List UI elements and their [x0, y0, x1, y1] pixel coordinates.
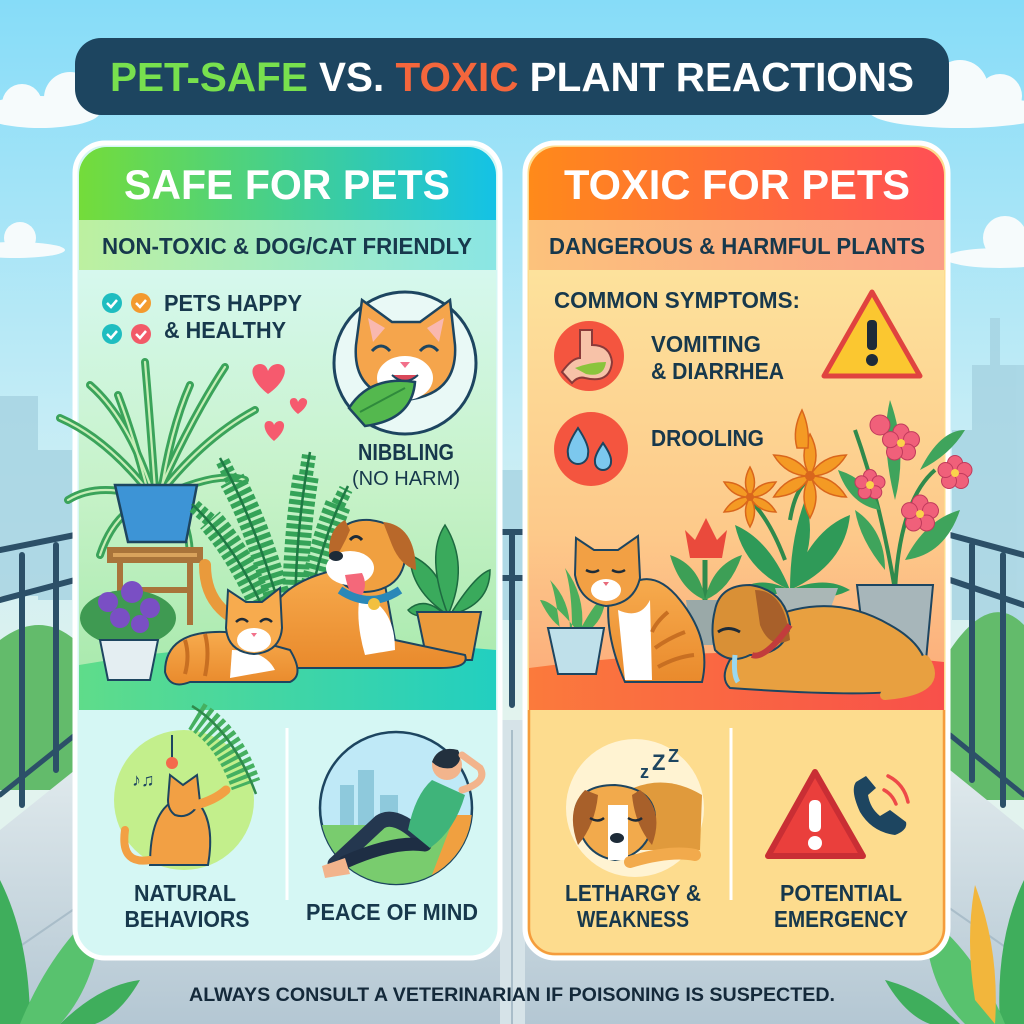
icon: emergency triangle and phone [768, 772, 908, 856]
icon: potted plant right [408, 525, 490, 660]
icon: warning triangle [824, 292, 920, 376]
vomiting text [651, 331, 784, 384]
toxic subheader: DANGEROUS & HARMFUL PLANTS [549, 233, 925, 259]
tulip [670, 518, 742, 645]
safe header [79, 147, 496, 220]
lethargy text: LETHARGY & [565, 880, 701, 906]
railings [0, 532, 1024, 805]
nibbling text: NIBBLING [358, 439, 454, 465]
icon: sick cat [575, 536, 704, 682]
nibbling text: (NO HARM) [352, 468, 460, 490]
toxic subheader [529, 220, 944, 270]
icon: lethargic dog [566, 739, 704, 877]
natural behaviors text: NATURAL [134, 880, 236, 906]
panel: toxic for pets [525, 143, 972, 958]
icon: lethargic dog: z [640, 762, 649, 782]
icon: stomach [554, 321, 624, 391]
icon: happy dog [205, 520, 466, 668]
title text: PET-SAFE VS. TOXIC PLANT REACTIONS [110, 54, 914, 100]
common symptoms text: COMMON SYMPTOMS: [554, 287, 800, 313]
left small plant [540, 568, 606, 674]
icon: sick dog [712, 585, 930, 695]
natural behaviors text: BEHAVIORS [124, 906, 250, 932]
icon: violet plant [80, 581, 176, 680]
footer note: ALWAYS CONSULT A VETERINARIAN IF POISONING IS SUSPECTED. [189, 985, 835, 1006]
ground [79, 643, 496, 710]
pets happy text: PETS HAPPY [164, 290, 302, 316]
title banner [75, 38, 949, 115]
nibbling text [352, 439, 460, 490]
potential emergency text: EMERGENCY [774, 906, 908, 932]
check icons [102, 293, 151, 344]
floor [0, 770, 1024, 1024]
icon: peace of mind [320, 732, 482, 885]
drooling text: DROOLING [651, 425, 764, 451]
toxic illustrated section [529, 270, 944, 710]
safe illustrated section [79, 270, 496, 710]
potential emergency text [774, 880, 908, 932]
potential emergency text: POTENTIAL [780, 880, 902, 906]
pets happy text [164, 290, 302, 343]
icon: droplets [554, 412, 628, 486]
safe subheader: NON-TOXIC & DOG/CAT FRIENDLY [102, 233, 472, 259]
icon: toxic plants [540, 400, 972, 674]
icon: fern [192, 452, 348, 625]
peace of mind text: PEACE OF MIND [306, 899, 478, 925]
corner leaves [0, 880, 1024, 1024]
toxic header: TOXIC FOR PETS [564, 161, 910, 208]
safe subheader [79, 220, 496, 270]
icon: natural behaviors cat: ♪♫ [132, 770, 154, 790]
vomiting text: VOMITING [651, 331, 761, 357]
icon: lethargic dog: Z [652, 750, 665, 775]
clouds [0, 60, 1024, 268]
bushes [0, 625, 75, 790]
safe header: SAFE FOR PETS [124, 161, 450, 208]
toxic divider [730, 728, 732, 900]
icon: natural behaviors cat [114, 706, 256, 870]
vomiting text: & DIARRHEA [651, 358, 784, 384]
lily [722, 410, 850, 610]
pets happy text: & HEALTHY [164, 317, 286, 343]
lethargy text: WEAKNESS [577, 906, 689, 932]
icon: lethargic dog: Z [668, 746, 679, 766]
icon: happy cat [165, 588, 298, 684]
natural behaviors text [124, 880, 250, 932]
panel: safe for pets [60, 143, 500, 958]
icon: hearts [252, 364, 307, 441]
skyline [0, 318, 1024, 625]
toxic header [529, 147, 944, 220]
safe divider [286, 728, 288, 900]
icon: cat nibbling leaf [334, 292, 476, 434]
oleander [838, 400, 972, 660]
lethargy text [565, 880, 701, 932]
icon: spider plant [60, 362, 255, 625]
toxic panel border [529, 710, 944, 954]
